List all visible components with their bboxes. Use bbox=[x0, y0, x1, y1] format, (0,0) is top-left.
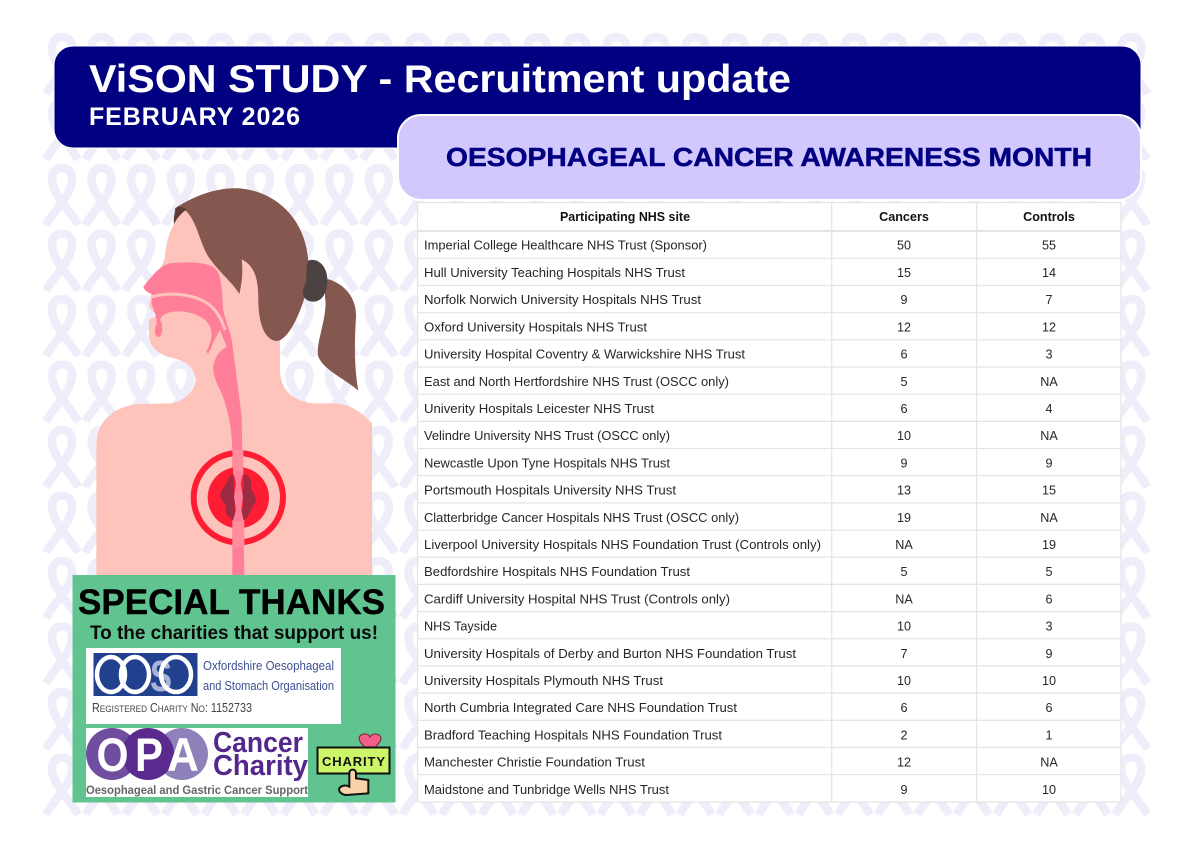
table controls column: NA bbox=[1040, 511, 1058, 525]
table cancers column: 7 bbox=[900, 647, 908, 661]
table site names: NHS Tayside bbox=[424, 620, 497, 634]
table controls column: NA bbox=[1040, 429, 1058, 443]
table cancers column: 10 bbox=[897, 674, 911, 688]
hair tie bbox=[303, 260, 327, 302]
table cancers column: 10 bbox=[897, 429, 911, 443]
table controls column bbox=[1040, 238, 1058, 797]
date subtitle: FEBRUARY 2026 bbox=[89, 103, 300, 131]
table cancers column: 6 bbox=[900, 348, 908, 362]
table controls column: 14 bbox=[1042, 266, 1056, 280]
table site names: Velindre University NHS Trust (OSCC only) bbox=[424, 429, 670, 443]
table cancers column: 5 bbox=[900, 565, 908, 579]
table controls column: 19 bbox=[1042, 538, 1056, 552]
logo: OPA cancer charity: Charity bbox=[213, 750, 308, 782]
table cancers column: 9 bbox=[900, 456, 908, 470]
table header row: Controls bbox=[1023, 210, 1075, 224]
panel: special thanks bbox=[72, 575, 396, 802]
icon: charity sign with heart and pointing hand: CHARITY bbox=[322, 754, 385, 769]
table controls column: NA bbox=[1040, 375, 1058, 389]
table header row: Participating NHS site bbox=[560, 210, 690, 224]
logo: OPA cancer charity: Oesophageal and Gastric Cancer Support bbox=[86, 783, 308, 797]
heading: special thanks: SPECIAL THANKS bbox=[78, 583, 385, 622]
oesophagus airway bbox=[143, 262, 244, 575]
table site names: East and North Hertfordshire NHS Trust (OSCC only) bbox=[424, 375, 729, 389]
table cancers column: 13 bbox=[897, 484, 911, 498]
table controls column: 9 bbox=[1045, 647, 1053, 661]
logo: OCSO bbox=[86, 648, 341, 724]
logo: OPA cancer charity bbox=[86, 727, 308, 797]
logo: OCSO: S bbox=[150, 652, 172, 701]
logo: OPA cancer charity: A bbox=[167, 728, 199, 781]
table site names: Newcastle Upon Tyne Hospitals NHS Trust bbox=[424, 456, 671, 470]
title: ViSON STUDY - Recruitment update bbox=[89, 58, 791, 101]
table: recruitment by NHS site bbox=[417, 202, 1121, 802]
table cancers column bbox=[895, 238, 913, 797]
table controls column: 10 bbox=[1042, 674, 1056, 688]
table controls column: 4 bbox=[1045, 402, 1053, 416]
table controls column: 1 bbox=[1045, 728, 1053, 742]
table controls column: 5 bbox=[1045, 565, 1053, 579]
table controls column: NA bbox=[1040, 756, 1058, 770]
icon: charity sign with heart and pointing hand bbox=[318, 734, 390, 795]
logo: OCSO: REGISTERED CHARITY NO: 1152733 bbox=[92, 701, 252, 715]
logo: OPA cancer charity: P bbox=[135, 728, 163, 781]
table site names: Norfolk Norwich University Hospitals NHS Trust bbox=[424, 293, 702, 307]
hair bbox=[174, 188, 308, 341]
logo: OCSO: Oxfordshire Oesophageal bbox=[203, 659, 334, 673]
header banner bbox=[54, 46, 1141, 148]
logo: OPA cancer charity: Cancer bbox=[213, 727, 303, 759]
table cancers column: 50 bbox=[897, 238, 911, 252]
table controls column: 10 bbox=[1042, 783, 1056, 797]
table site names: Manchester Christie Foundation Trust bbox=[424, 756, 646, 770]
table cancers column: NA bbox=[895, 592, 913, 606]
table controls column: 3 bbox=[1045, 620, 1053, 634]
awareness month banner: OESOPHAGEAL CANCER AWARENESS MONTH bbox=[446, 142, 1092, 172]
table site names: Hull University Teaching Hospitals NHS Trust bbox=[424, 266, 686, 280]
table cancers column: 15 bbox=[897, 266, 911, 280]
table cancers column: 12 bbox=[897, 320, 911, 334]
table site names: Univerity Hospitals Leicester NHS Trust bbox=[424, 402, 655, 416]
table site names: Bradford Teaching Hospitals NHS Foundation Trust bbox=[424, 728, 723, 742]
table site names: Bedfordshire Hospitals NHS Foundation Trust bbox=[424, 565, 691, 579]
table site names: Liverpool University Hospitals NHS Foundation Trust (Controls only) bbox=[424, 538, 821, 552]
table controls column: 7 bbox=[1045, 293, 1053, 307]
table site names: Clatterbridge Cancer Hospitals NHS Trust (OSCC only) bbox=[424, 511, 739, 525]
table controls column: 6 bbox=[1045, 701, 1053, 715]
awareness month banner bbox=[398, 115, 1141, 200]
table cancers column: NA bbox=[895, 538, 913, 552]
ponytail bbox=[318, 278, 358, 391]
table site names: North Cumbria Integrated Care NHS Foundation Trust bbox=[424, 701, 738, 715]
table cancers column: 19 bbox=[897, 511, 911, 525]
logo: OCSO: and Stomach Organisation bbox=[203, 679, 334, 693]
table cancers column: 12 bbox=[897, 756, 911, 770]
table site names: Portsmouth Hospitals University NHS Trust bbox=[424, 484, 677, 498]
tumour target rings bbox=[194, 450, 283, 547]
table site names: University Hospitals of Derby and Burton NHS Foundation Trust bbox=[424, 647, 797, 661]
table cancers column: 10 bbox=[897, 620, 911, 634]
table controls column: 15 bbox=[1042, 484, 1056, 498]
table cancers column: 2 bbox=[900, 728, 908, 742]
table cancers column: 9 bbox=[900, 293, 908, 307]
table site names: University Hospital Coventry & Warwickshire NHS Trust bbox=[424, 348, 746, 362]
table controls column: 6 bbox=[1045, 592, 1053, 606]
table controls column: 3 bbox=[1045, 348, 1053, 362]
table site names: University Hospitals Plymouth NHS Trust bbox=[424, 674, 664, 688]
illustration: oesophagus anatomy profile bbox=[96, 188, 372, 575]
logo: OPA cancer charity: O bbox=[96, 728, 128, 781]
table site names bbox=[424, 238, 821, 797]
table cancers column: 6 bbox=[900, 701, 908, 715]
table header row bbox=[560, 210, 1075, 224]
table controls column: 9 bbox=[1045, 456, 1053, 470]
table cancers column: 6 bbox=[900, 402, 908, 416]
subheading: To the charities that support us! bbox=[90, 623, 378, 644]
table site names: Maidstone and Tunbridge Wells NHS Trust bbox=[424, 783, 670, 797]
body and head bbox=[96, 210, 372, 575]
table cancers column: 9 bbox=[900, 783, 908, 797]
table cancers column: 5 bbox=[900, 375, 908, 389]
table site names: Cardiff University Hospital NHS Trust (Controls only) bbox=[424, 592, 730, 606]
table site names: Oxford University Hospitals NHS Trust bbox=[424, 320, 648, 334]
table site names: Imperial College Healthcare NHS Trust (Sponsor) bbox=[424, 238, 707, 252]
table controls column: 12 bbox=[1042, 320, 1056, 334]
table controls column: 55 bbox=[1042, 238, 1056, 252]
table header row: Cancers bbox=[879, 210, 929, 224]
